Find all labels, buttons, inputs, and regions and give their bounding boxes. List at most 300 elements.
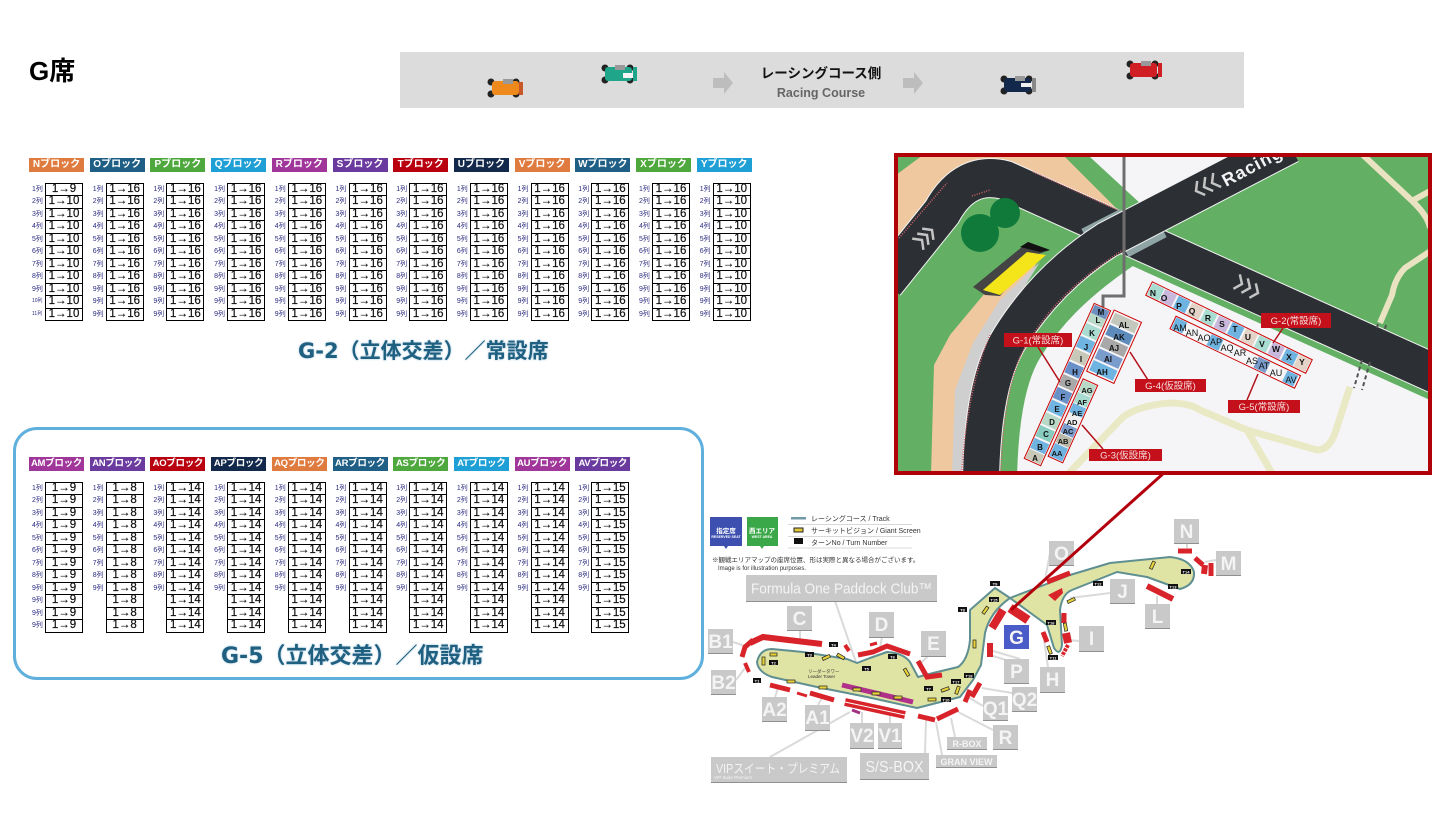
- block P: [150, 158, 205, 321]
- block AS: 2列: [396, 497, 407, 504]
- block AV: 1→15: [595, 532, 626, 544]
- block AQ: 1→14: [291, 519, 322, 531]
- seats: G-2: [1146, 282, 1312, 373]
- heading: G-5: G-5（立体交差）／仮設席: [221, 644, 484, 669]
- block AV: 1列: [578, 484, 589, 492]
- block P: 3列: [153, 210, 164, 218]
- block AO: AOブロック: [153, 458, 203, 469]
- block S: 9列: [336, 298, 346, 305]
- block S: 8列: [336, 273, 346, 280]
- block AR: 1→14: [352, 482, 383, 494]
- block AS: ASブロック: [396, 458, 445, 469]
- block Q: 1列: [214, 186, 225, 192]
- block AU: 1列: [518, 484, 528, 492]
- block X: 6列: [639, 248, 650, 255]
- legend: 西エリア: [749, 527, 776, 535]
- block AS: 1→14: [413, 532, 444, 544]
- seats: G-1: M: [1098, 308, 1105, 317]
- block O: 7列: [93, 260, 104, 268]
- block N: 9列: [32, 286, 43, 292]
- circuit map: [708, 514, 1241, 783]
- block W: Wブロック: [578, 159, 628, 170]
- block AM: 1列: [32, 484, 43, 492]
- block V: 1→16: [534, 282, 565, 294]
- block S: 2列: [336, 198, 346, 205]
- block P: 1→16: [170, 245, 201, 257]
- block R: 1→16: [291, 308, 322, 320]
- trees: [961, 198, 1020, 252]
- paddock: [842, 685, 913, 702]
- block AR: 6列: [336, 547, 346, 554]
- seats: G-1: F: [1061, 393, 1066, 402]
- block AU: 1→14: [534, 606, 565, 618]
- section labels: R: [999, 728, 1013, 749]
- block W: 1→16: [595, 258, 626, 270]
- seats: G-4: AH: [1096, 368, 1108, 377]
- seats: G-2: Y: [1299, 357, 1305, 367]
- block X: 5列: [639, 236, 650, 242]
- block AM: 1→9: [52, 544, 76, 556]
- block AT: 1→14: [474, 606, 504, 618]
- block Y: 1→10: [716, 282, 747, 294]
- block X: 9列: [639, 286, 650, 292]
- block Q: 1→16: [231, 182, 261, 194]
- block AS: 1→14: [413, 606, 444, 618]
- block Y: 3列: [700, 210, 711, 218]
- block AN: 1→8: [113, 506, 137, 518]
- block V: Vブロック: [519, 159, 565, 170]
- block N: 1→10: [49, 308, 79, 320]
- block AP: [211, 457, 266, 633]
- block AT: 6列: [457, 547, 468, 554]
- block AQ: [272, 457, 327, 633]
- block AR: 1→14: [352, 569, 383, 581]
- block U: 3列: [457, 210, 468, 218]
- callouts: G-1(常設席): [1013, 334, 1063, 346]
- seats: G-1: J: [1084, 343, 1088, 352]
- block AV: AVブロック: [578, 458, 627, 469]
- block X: 2列: [639, 198, 650, 205]
- block AO: 1→14: [170, 606, 201, 618]
- block AV: 1→15: [595, 544, 626, 556]
- block AM: 1→9: [52, 494, 76, 506]
- block AV: 1→15: [595, 619, 626, 631]
- block W: 7列: [578, 260, 589, 268]
- block W: 2列: [578, 198, 589, 205]
- block Y: 5列: [700, 236, 711, 242]
- block Q: [211, 158, 266, 321]
- block R: 1→16: [291, 245, 322, 257]
- turn numbers: T9: [993, 582, 998, 586]
- block AM: 4列: [32, 522, 43, 529]
- block X: 1→16: [656, 208, 686, 220]
- block AM: 1→9: [52, 606, 76, 618]
- block AV: 1→15: [595, 482, 626, 494]
- block R: 5列: [275, 236, 286, 242]
- section labels: N: [1180, 522, 1193, 543]
- section labels: E: [927, 634, 940, 655]
- block X: 1→16: [656, 270, 686, 282]
- block AU: 2列: [518, 497, 528, 504]
- block O: 1→16: [109, 232, 140, 244]
- block AS: 1→14: [413, 594, 444, 606]
- block U: Uブロック: [458, 159, 505, 170]
- block S: 5列: [336, 236, 346, 242]
- block S: 1→16: [352, 270, 383, 282]
- block Y: 1→10: [716, 308, 747, 320]
- block N: 4列: [32, 223, 43, 230]
- block T: 5列: [396, 236, 407, 242]
- seats: G-1: D: [1049, 418, 1055, 427]
- seats: G-4: AL: [1119, 321, 1129, 330]
- block N: 1→10: [49, 295, 79, 307]
- block AQ: 3列: [275, 510, 286, 516]
- block AO: 9列: [153, 584, 164, 592]
- block AS: 1→14: [413, 482, 444, 494]
- block V: 5列: [518, 236, 528, 242]
- block W: 1列: [578, 186, 589, 192]
- block T: 9列: [396, 310, 407, 318]
- block R: 4列: [275, 223, 286, 230]
- block Q: 1→16: [231, 258, 261, 270]
- block U: [454, 158, 509, 321]
- block AM: 1→9: [52, 619, 76, 631]
- block AU: 1→14: [534, 569, 565, 581]
- block AS: 1→14: [413, 544, 444, 556]
- seats: G-1: H: [1072, 368, 1078, 377]
- block AQ: 7列: [275, 560, 286, 566]
- block AP: 1→14: [231, 482, 261, 494]
- block AP: 2列: [214, 497, 225, 504]
- block V: 1→16: [534, 308, 565, 320]
- seats: G-5: AS: [1246, 356, 1258, 366]
- block W: 1→16: [595, 182, 626, 194]
- block AQ: 1→14: [291, 482, 322, 494]
- block N: 1→10: [49, 220, 79, 232]
- block T: 1→16: [413, 195, 444, 207]
- seats: G-5: AU: [1270, 368, 1282, 378]
- block AR: 1→14: [352, 532, 383, 544]
- block O: 1→16: [109, 208, 140, 220]
- crossing dashes: [1354, 324, 1386, 390]
- block O: 1列: [93, 186, 104, 192]
- block R: 3列: [275, 210, 286, 218]
- block Y: 1→10: [716, 208, 747, 220]
- block R: Rブロック: [276, 159, 323, 170]
- block AS: 1→14: [413, 494, 444, 506]
- block N: 1→10: [49, 232, 79, 244]
- panel: G-5: [13, 427, 704, 680]
- block T: 1→16: [413, 295, 444, 307]
- block AS: 1→14: [413, 519, 444, 531]
- block Y: 1→10: [716, 232, 747, 244]
- block S: 9列: [336, 286, 346, 292]
- block Y: 7列: [700, 260, 711, 268]
- seats: G-5: AR: [1234, 348, 1247, 358]
- block W: 1→16: [595, 270, 626, 282]
- block Q: 3列: [214, 210, 225, 218]
- block AU: 5列: [518, 534, 528, 542]
- block AS: 5列: [396, 534, 407, 542]
- block AU: 1→14: [534, 494, 565, 506]
- block N: 1→10: [49, 245, 79, 257]
- block AQ: 4列: [275, 522, 286, 529]
- block W: 1→16: [595, 308, 626, 320]
- block Q: 8列: [214, 273, 225, 280]
- block R: 8列: [275, 273, 286, 280]
- block AP: 1→14: [231, 594, 261, 606]
- block AT: 2列: [457, 497, 468, 504]
- seats: G-1: L: [1096, 316, 1101, 325]
- legend: ※観戦エリアマップの座席位置、形は実際と異なる場合がございます。: [712, 555, 919, 564]
- block X: 1→16: [656, 195, 686, 207]
- block AV: 4列: [578, 522, 589, 529]
- block AN: 1→8: [113, 582, 137, 594]
- seats: G-4: AI: [1104, 355, 1112, 364]
- turn numbers: T11: [1050, 656, 1057, 660]
- block O: 1→16: [109, 295, 140, 307]
- block R: 1→16: [291, 295, 322, 307]
- seats: G-2: W: [1272, 344, 1281, 354]
- icon: orange car: [488, 78, 523, 98]
- block U: 1→16: [474, 195, 504, 207]
- icon: green car: [602, 64, 637, 84]
- block V: 1→16: [534, 270, 565, 282]
- seats: G-1: E: [1054, 405, 1060, 414]
- block P: 1→16: [170, 220, 201, 232]
- block R: 9列: [275, 298, 286, 305]
- block Q: 4列: [214, 223, 225, 230]
- text: racing course: Racing Course: [777, 86, 865, 100]
- block AO: 3列: [153, 510, 164, 516]
- block AO: 5列: [153, 534, 164, 542]
- block S: 1→16: [352, 182, 383, 194]
- legend: RESERVED SEAT: [711, 535, 741, 539]
- callouts: G-4(仮設席): [1145, 380, 1196, 392]
- block Y: 1→10: [716, 182, 747, 194]
- turn numbers: T13: [1170, 584, 1177, 590]
- block AV: 5列: [578, 534, 589, 542]
- seats: G-2: U: [1245, 332, 1251, 342]
- legend: レーシングコース / Track: [811, 514, 890, 523]
- block Q: 2列: [214, 198, 225, 205]
- block O: 2列: [93, 198, 104, 205]
- block U: 9列: [457, 286, 468, 292]
- block Q: 1→16: [231, 220, 261, 232]
- block AQ: 1→14: [291, 544, 322, 556]
- block N: 6列: [32, 248, 43, 255]
- block X: 9列: [639, 298, 650, 305]
- block AR: 1→14: [352, 619, 383, 631]
- block O: 6列: [93, 248, 104, 255]
- block Y: 2列: [700, 198, 711, 205]
- block AN: 1→8: [113, 606, 137, 618]
- seat tables: G-2 blocks: [29, 158, 752, 321]
- block AN: 4列: [93, 522, 104, 529]
- block AN: 1→8: [113, 482, 137, 494]
- turn numbers: T15: [991, 598, 998, 602]
- block AN: 3列: [93, 510, 104, 516]
- block N: 5列: [32, 236, 43, 242]
- block AV: 8列: [578, 572, 589, 579]
- block T: 3列: [396, 210, 407, 218]
- block AM: 1→9: [52, 519, 76, 531]
- legend: サーキットビジョン / Giant Screen: [811, 526, 921, 535]
- legend: [710, 514, 921, 572]
- seats: G-3: AG: [1081, 386, 1093, 395]
- block U: 1→16: [474, 182, 504, 194]
- block AM: 7列: [32, 560, 43, 566]
- block AT: 3列: [457, 510, 468, 516]
- block Y: 9列: [700, 286, 711, 292]
- block P: 4列: [153, 223, 164, 230]
- section labels: A1: [805, 708, 830, 729]
- block T: 1→16: [413, 232, 444, 244]
- block V: 6列: [518, 248, 528, 255]
- small map text: leader tower: [808, 668, 840, 679]
- chevrons: [912, 173, 1258, 298]
- block AU: 1→14: [534, 519, 565, 531]
- block Y: 1→10: [716, 258, 747, 270]
- block P: 1→16: [170, 258, 201, 270]
- block AM: 1→9: [52, 482, 76, 494]
- block S: 6列: [336, 248, 346, 255]
- block U: 1→16: [474, 295, 504, 307]
- block N: 10列: [32, 298, 43, 304]
- block R: 1列: [275, 186, 286, 192]
- block W: 9列: [578, 310, 589, 318]
- block AT: [454, 457, 509, 633]
- block AV: [575, 457, 630, 633]
- block X: 1列: [639, 186, 650, 192]
- callouts: G-5(常設席): [1239, 401, 1289, 413]
- section labels: B1: [708, 632, 733, 653]
- block R: 9列: [275, 310, 286, 318]
- block S: 1→16: [352, 245, 383, 257]
- block AT: 1→14: [474, 582, 504, 594]
- block AM: 3列: [32, 510, 43, 516]
- block AQ: 1列: [275, 484, 286, 492]
- block AT: 1→14: [474, 482, 504, 494]
- section labels: Formula One Paddock Club™: [751, 580, 932, 598]
- block Y: 1→10: [716, 270, 747, 282]
- block V: 9列: [518, 298, 528, 305]
- block U: 5列: [457, 236, 468, 242]
- block U: 6列: [457, 248, 468, 255]
- block W: 1→16: [595, 282, 626, 294]
- block AO: 1→14: [170, 582, 201, 594]
- block AO: 1→14: [170, 569, 201, 581]
- block AP: 7列: [214, 560, 225, 566]
- block X: Xブロック: [640, 159, 687, 170]
- section labels: D: [875, 615, 888, 636]
- block AP: 1→14: [231, 569, 261, 581]
- block O: 9列: [93, 298, 104, 305]
- block W: [575, 158, 630, 321]
- block N: 1→10: [49, 208, 79, 220]
- block Q: 1→16: [231, 295, 261, 307]
- block AR: 5列: [336, 534, 346, 542]
- block W: 8列: [578, 273, 589, 280]
- block W: 5列: [578, 236, 589, 242]
- block P: 5列: [153, 236, 164, 242]
- block AP: 1→14: [231, 494, 261, 506]
- block O: 1→16: [109, 220, 140, 232]
- block V: 1→16: [534, 208, 565, 220]
- turn numbers: T6: [890, 654, 896, 660]
- callouts: G-2(常設席): [1271, 315, 1321, 327]
- leader lines: [1038, 328, 1283, 449]
- section labels: P: [1010, 662, 1023, 683]
- block S: 1列: [336, 186, 346, 192]
- seats: G-3: AA: [1052, 449, 1063, 458]
- block Y: 6列: [700, 248, 711, 255]
- seats: G-5: AV: [1285, 375, 1297, 385]
- block AN: 1→8: [113, 619, 137, 631]
- turn numbers: T17: [953, 680, 960, 684]
- block AT: 1→14: [474, 619, 504, 631]
- block N: 1→10: [49, 258, 79, 270]
- block O: 1→16: [109, 270, 140, 282]
- block S: 1→16: [352, 195, 383, 207]
- block AV: 7列: [578, 560, 589, 566]
- seat tables: G-5 blocks: [29, 457, 630, 633]
- block X: 1→16: [656, 258, 686, 270]
- block T: 1→16: [413, 208, 444, 220]
- block AR: 1→14: [352, 544, 383, 556]
- block AN: 9列: [93, 584, 104, 592]
- block P: 1→16: [170, 295, 201, 307]
- block AU: 3列: [518, 510, 528, 516]
- block T: 2列: [396, 198, 407, 205]
- turn numbers: T7: [926, 686, 932, 692]
- block R: 1→16: [291, 232, 322, 244]
- block Q: 9列: [214, 310, 225, 318]
- heading: G-2: G-2（立体交差）／常設席: [298, 339, 549, 363]
- seats: G-3: AC: [1063, 427, 1074, 436]
- block AP: 1→14: [231, 582, 261, 594]
- block AT: 1→14: [474, 506, 504, 518]
- block Y: [697, 158, 752, 321]
- block AO: 1→14: [170, 556, 201, 568]
- seats: G-5: AM: [1173, 323, 1187, 333]
- block AR: [333, 457, 388, 633]
- block AN: 7列: [93, 560, 104, 566]
- section labels: C: [793, 609, 807, 630]
- block P: 9列: [153, 310, 164, 318]
- block AV: 2列: [578, 497, 589, 504]
- block T: 8列: [396, 273, 407, 280]
- block AN: ANブロック: [92, 458, 142, 469]
- block R: [272, 158, 327, 321]
- seats: G-1: B: [1037, 443, 1043, 452]
- block Q: 9列: [214, 298, 225, 305]
- inset map: G seating area: [894, 153, 1432, 475]
- header bar: racing course direction: [400, 52, 1244, 108]
- block AT: 5列: [457, 534, 468, 542]
- block P: Pブロック: [155, 159, 201, 170]
- block X: 1→16: [656, 282, 686, 294]
- block AQ: 2列: [275, 497, 286, 504]
- block AV: 1→15: [595, 594, 626, 606]
- block V: 1列: [518, 186, 528, 192]
- block AT: 1→14: [474, 544, 504, 556]
- block AQ: 9列: [275, 584, 286, 592]
- seats: G-5: AT: [1259, 361, 1270, 371]
- block V: 8列: [518, 273, 528, 280]
- seats: G-3: AD: [1067, 418, 1078, 427]
- block AM: 2列: [32, 497, 43, 504]
